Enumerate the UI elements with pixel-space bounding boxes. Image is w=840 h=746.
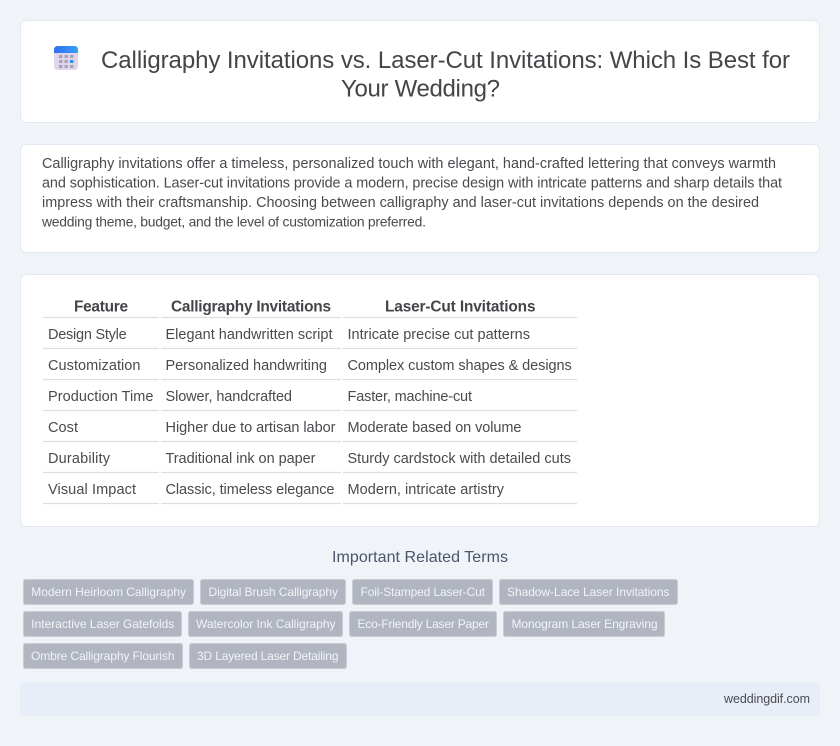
tag: Watercolor Ink Calligraphy [196, 617, 336, 631]
panel: comparison table [20, 274, 820, 526]
tag: Shadow-Lace Laser Invitations [507, 585, 670, 599]
tag [24, 644, 182, 668]
tag [352, 580, 492, 604]
footer: weddingdif.com [723, 692, 810, 706]
row: customization: Personalized handwriting [166, 358, 327, 374]
row: design style: Elegant handwritten script [166, 327, 332, 343]
tag: Monogram Laser Engraving [512, 617, 658, 631]
panel: header [20, 20, 820, 122]
tag: Ombre Calligraphy Flourish [31, 649, 174, 663]
row: production time: Faster, machine-cut [348, 389, 472, 405]
tag [24, 580, 194, 604]
row: durability: Traditional ink on paper [166, 451, 316, 467]
title: Calligraphy Invitations vs. Laser-Cut Invitations: Which Is Best for [101, 47, 790, 74]
row: customization [48, 358, 572, 374]
intro paragraph: impress with their craftsmanship. Choosing between calligraphy and laser-cut invitations depends on the desired [42, 195, 759, 211]
tag [504, 612, 664, 636]
row: visual impact: Classic, timeless elegance [166, 482, 334, 498]
row: production time: Production Time [48, 389, 154, 405]
panel: intro [20, 144, 820, 252]
table header [74, 298, 536, 316]
row: design style: Design Style [48, 327, 127, 343]
row: design style [48, 327, 530, 343]
tag [350, 612, 496, 636]
icon: calendar [54, 46, 78, 70]
title: Your Wedding? [341, 76, 500, 102]
tag: Interactive Laser Gatefolds [31, 617, 174, 631]
tag [24, 612, 182, 636]
tag [188, 612, 342, 636]
intro paragraph: Calligraphy invitations offer a timeless, personalized touch with elegant, hand-crafted lettering that conveys warmth [42, 156, 776, 172]
intro paragraph: wedding theme, budget, and the level of customization preferred. [41, 214, 426, 230]
row: customization: Customization [48, 358, 140, 374]
tag [200, 580, 346, 604]
row: production time: Slower, handcrafted [166, 389, 292, 405]
row: visual impact [48, 482, 505, 498]
tag: Foil-Stamped Laser-Cut [360, 585, 486, 599]
title [101, 47, 790, 102]
tag: 3D Layered Laser Detailing [197, 649, 338, 663]
table header: Feature [74, 298, 128, 316]
intro paragraph: and sophistication. Laser-cut invitations provide a modern, precise design with intricate patterns and sharp details that [42, 176, 782, 192]
heading: related terms: Important Related Terms [332, 549, 508, 566]
table rules [43, 318, 577, 504]
row: durability [48, 451, 571, 467]
row: design style: Intricate precise cut patterns [348, 327, 530, 343]
row: durability: Sturdy cardstock with detailed cuts [348, 451, 571, 467]
tag [190, 644, 346, 668]
footer [20, 682, 820, 716]
related term tags [24, 580, 678, 668]
table header: Laser-Cut Invitations [385, 298, 536, 316]
row: durability: Durability [48, 451, 111, 467]
row: cost: Cost [48, 420, 78, 436]
row: cost: Higher due to artisan labor [166, 420, 336, 436]
table header: Calligraphy Invitations [171, 298, 331, 316]
tag: Modern Heirloom Calligraphy [31, 585, 186, 599]
row: production time [48, 389, 472, 405]
tag: Digital Brush Calligraphy [208, 585, 338, 599]
tag: Eco-Friendly Laser Paper [358, 617, 489, 631]
intro paragraph [41, 156, 782, 230]
row: visual impact: Modern, intricate artistry [348, 482, 505, 498]
row: cost: Moderate based on volume [348, 420, 522, 436]
row: cost [48, 420, 522, 436]
row: customization: Complex custom shapes & designs [348, 358, 572, 374]
row: visual impact: Visual Impact [48, 482, 136, 498]
tag [500, 580, 678, 604]
